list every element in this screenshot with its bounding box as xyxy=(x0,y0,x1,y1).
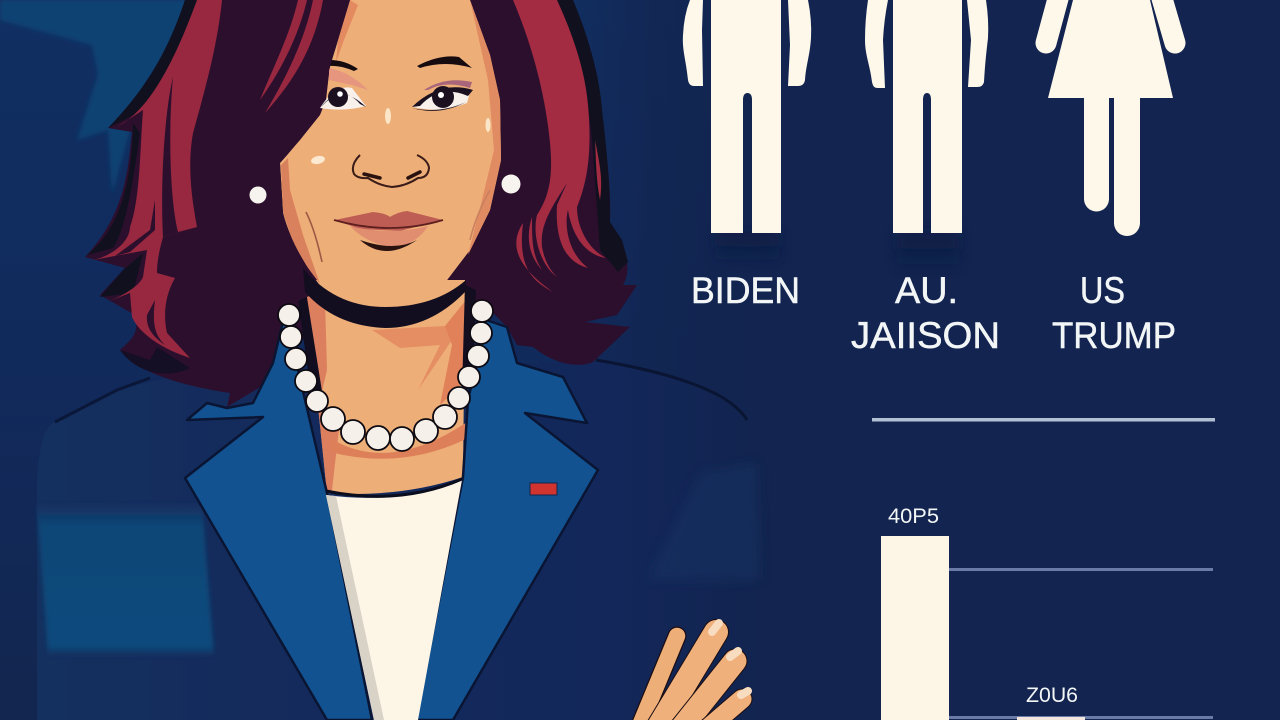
pearl necklace xyxy=(278,300,493,451)
bar chart xyxy=(881,505,1213,720)
figure icon: Biden xyxy=(683,0,811,233)
bar: short xyxy=(1017,717,1085,720)
white shirt xyxy=(326,479,462,720)
backdrop: blue panels behind portrait xyxy=(0,0,760,720)
label: Au. Jaiison: AU. xyxy=(895,270,958,311)
label: Au. Jaiison: JAIISON xyxy=(851,315,1000,356)
hair streaks over forehead xyxy=(260,0,323,113)
eyes and brows xyxy=(320,56,473,111)
earrings xyxy=(250,174,520,204)
mouth xyxy=(334,211,443,251)
label: US Trump: US xyxy=(1080,270,1125,311)
black neck edges xyxy=(296,285,476,410)
figure icon: middle figure xyxy=(865,0,988,233)
hair over face xyxy=(222,0,350,330)
figure labels xyxy=(691,270,1176,356)
label: US Trump xyxy=(1052,270,1176,356)
label: US Trump: TRUMP xyxy=(1052,315,1176,356)
figure icon: woman xyxy=(1046,0,1175,236)
figure shadows xyxy=(715,233,959,271)
jacket xyxy=(37,360,760,720)
hair back xyxy=(85,0,637,407)
value label: short bar: Z0U6 xyxy=(1026,684,1078,707)
nose xyxy=(353,108,429,187)
portrait xyxy=(37,0,760,720)
black hair edge left xyxy=(108,0,197,128)
black hair edge right xyxy=(557,0,628,272)
lapels xyxy=(185,313,598,720)
hair highlights left xyxy=(93,0,222,358)
face xyxy=(280,0,501,308)
divider rule xyxy=(872,418,1215,422)
hair dark strands left xyxy=(115,77,197,345)
bar: tall xyxy=(881,536,949,720)
lapel pin xyxy=(530,483,557,495)
label: Biden: BIDEN xyxy=(691,270,800,311)
hair highlights right xyxy=(513,0,606,292)
hand xyxy=(636,623,748,720)
value label: tall bar: 40P5 xyxy=(888,505,939,528)
label: Au. Jaiison xyxy=(851,270,1000,356)
chin shadow xyxy=(303,268,466,328)
highlights xyxy=(310,155,326,165)
neck xyxy=(305,280,470,494)
